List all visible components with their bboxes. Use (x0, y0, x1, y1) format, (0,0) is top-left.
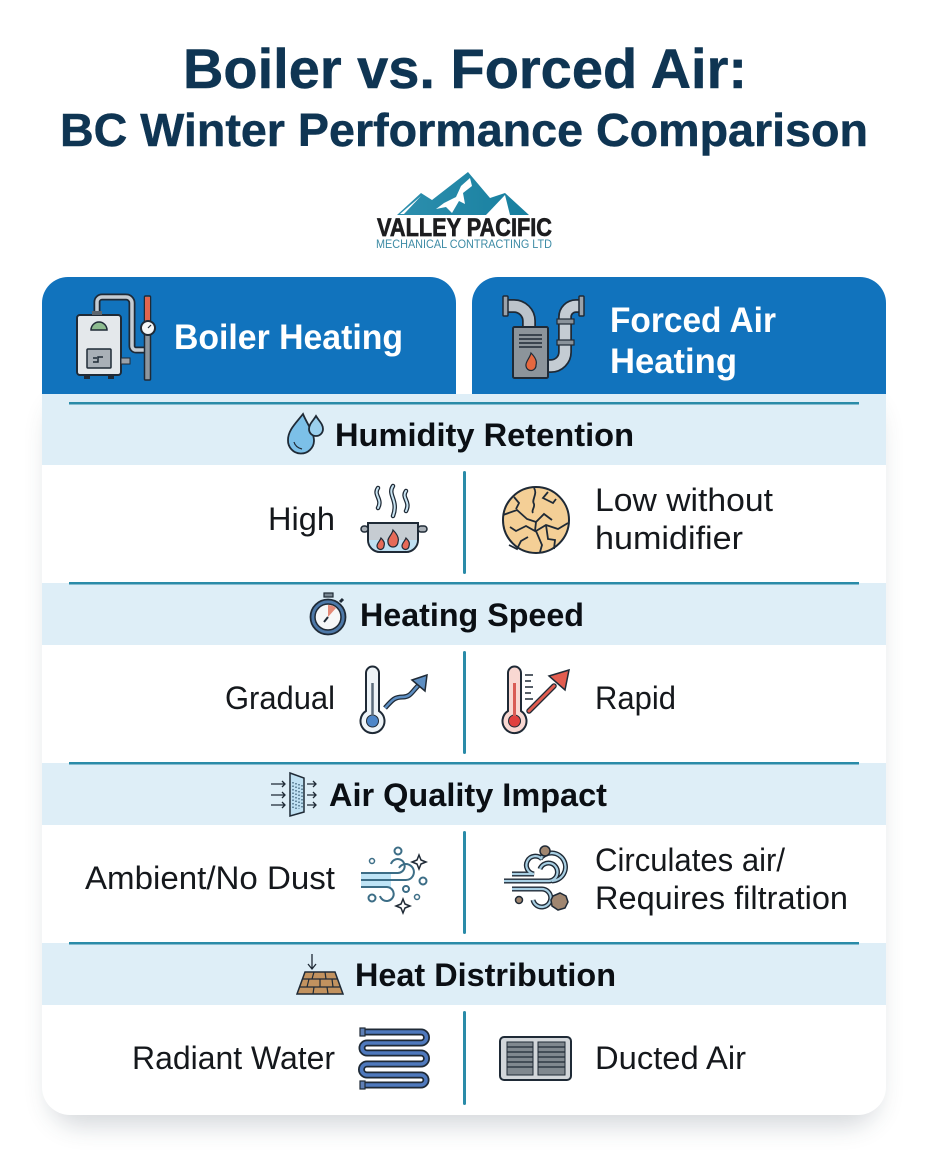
heading: Forced Air Heating: Forced Air (610, 301, 776, 340)
logo: Valley Pacific: VALLEY PACIFIC (377, 214, 552, 242)
icon: thermometer rapid (502, 667, 569, 733)
section: humidity retention (42, 394, 886, 465)
heading: Heat Distribution: Heat Distribution (355, 957, 616, 993)
heading: Heating Speed: Heating Speed (360, 597, 584, 633)
icon: air vent (500, 1037, 571, 1080)
text: High: High (268, 501, 335, 537)
row: humidity values (268, 471, 773, 574)
section: heating speed (42, 582, 886, 645)
heading: Air Quality Impact: Air Quality Impact (329, 777, 607, 813)
section: heat distribution (42, 942, 886, 1005)
text: Rapid: Rapid (595, 680, 676, 716)
row: heating speed values (225, 651, 676, 754)
heading: Forced Air Heating: Heating (610, 342, 737, 381)
text: Ducted Air: Ducted Air (595, 1040, 746, 1076)
text: Circulates air / Requires filtration: Circulates air/ (595, 842, 785, 878)
icon: cracked dry surface (503, 487, 569, 553)
panel: comparison table (42, 277, 886, 1115)
text: Low without humidifier: Low without (595, 482, 773, 518)
text: Radiant Water: Radiant Water (132, 1040, 335, 1076)
text: Circulates air / Requires filtration: Requires filtration (595, 880, 848, 916)
icon: stopwatch (310, 593, 346, 634)
heading: Humidity Retention: Humidity Retention (335, 417, 634, 453)
row: air quality values (85, 831, 848, 934)
row: heat distribution values (132, 1011, 746, 1105)
icon: dusty air (504, 846, 568, 910)
logo: Valley Pacific (376, 172, 552, 251)
icon: radiant tubing (360, 1028, 426, 1089)
title: BC Winter Performance Comparison (60, 104, 868, 156)
icon: furnace (503, 296, 584, 378)
column header: forced air heating (472, 277, 886, 394)
icon: air filter (271, 773, 316, 816)
icon: water drops (288, 414, 323, 453)
card shadow (50, 400, 878, 1125)
text: Low without humidifier: humidifier (595, 520, 743, 556)
heading: Boiler Heating: Boiler Heating (174, 318, 403, 357)
icon: clean air (361, 848, 426, 913)
icon: floor tiles (297, 954, 343, 994)
icon: boiler (77, 296, 155, 380)
icon: thermometer gradual (361, 667, 427, 733)
text: Gradual: Gradual (225, 680, 335, 716)
title (60, 37, 868, 156)
logo: Valley Pacific: MECHANICAL CONTRACTING LTD (376, 237, 552, 251)
title: Boiler vs. Forced Air: (183, 37, 747, 100)
column header: boiler heating (42, 277, 456, 394)
section: air quality impact (42, 762, 886, 825)
icon: steaming pot (361, 486, 427, 552)
text: Ambient/No Dust: Ambient/No Dust (85, 860, 335, 896)
